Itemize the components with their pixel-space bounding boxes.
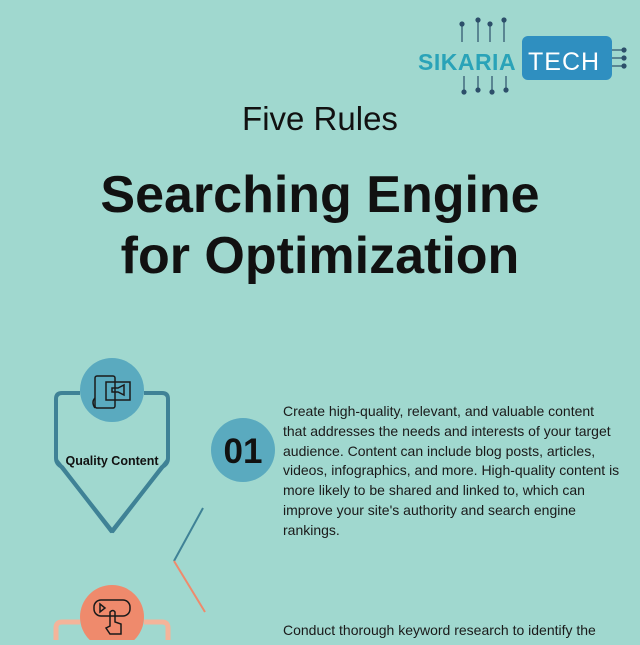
title — [100, 166, 540, 285]
title: Searching Engine — [100, 166, 540, 224]
subtitle: Five Rules: Five Rules — [242, 100, 398, 137]
panel: second frame (peach) — [56, 622, 168, 645]
text block: rule 2 description: Conduct thorough keyword research to identify the — [283, 622, 596, 638]
icon: number 01 badge — [211, 418, 275, 482]
text block: rule 1 description: more likely to be shared and linked to, which can — [283, 482, 585, 498]
icon: click button in orange blob — [80, 585, 144, 645]
logo: Sikaria Tech: TECH — [528, 48, 600, 76]
text block: rule 1 description: audience. Content can include blog posts, articles, — [283, 443, 595, 459]
label: Quality Content: Quality Content — [65, 454, 159, 468]
title: for Optimization — [121, 227, 519, 285]
icon: megaphone on tablet in blob — [80, 358, 144, 422]
text block: rule 1 description: Create high-quality, relevant, and valuable content — [283, 403, 594, 419]
icon: number 01 badge: 01 — [224, 432, 262, 471]
text block: rule 1 description: videos, infographics, and more. High-quality content is — [283, 462, 619, 478]
text block: rule 1 description — [283, 403, 619, 538]
panel: quality content shield — [56, 393, 168, 532]
text block: rule 1 description: improve your site's authority and search engine — [283, 502, 576, 518]
arrow: connector line — [174, 508, 205, 612]
text block: rule 1 description: rankings. — [283, 522, 340, 538]
logo: Sikaria Tech: SIKARIA — [418, 49, 516, 75]
diagram graphics — [54, 358, 275, 640]
text block: rule 1 description: that addresses the needs and interests of your target — [283, 423, 611, 439]
logo: Sikaria Tech — [418, 17, 627, 95]
